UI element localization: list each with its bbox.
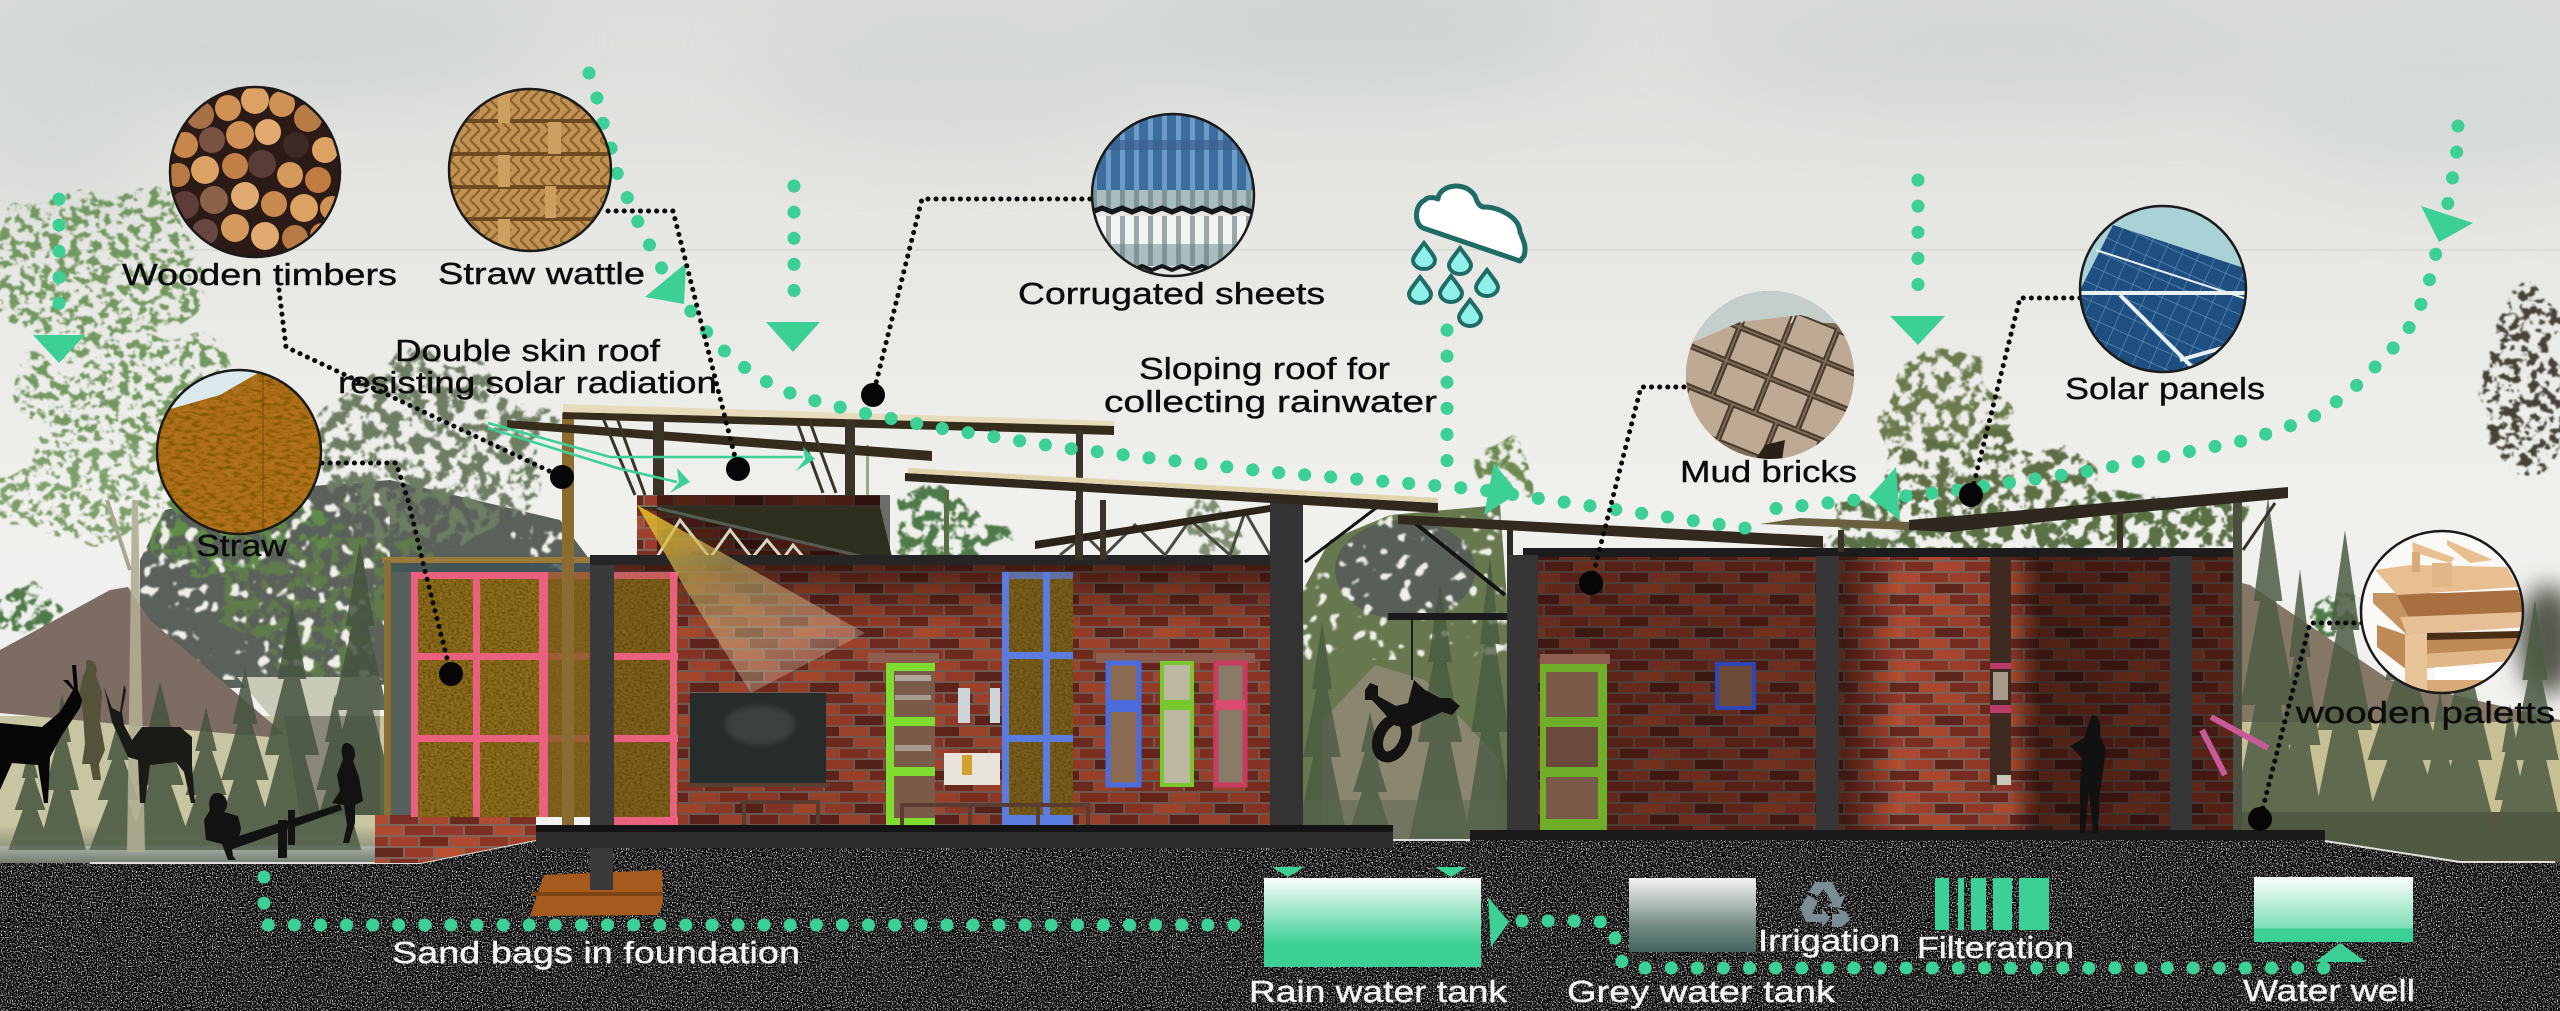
material: solar panels: [2080, 206, 2250, 375]
water flow: underground to well: [1488, 897, 2366, 968]
silhouette: woman: [2070, 715, 2106, 833]
double skin airflow arrows: [488, 423, 815, 493]
leader: wooden timbers: [279, 290, 574, 489]
label: Filteration: Filteration: [1917, 930, 2074, 965]
background: left tree: [0, 195, 250, 570]
building 1: straw panels with pink frame: [382, 413, 678, 827]
foundation with sand bags: [530, 848, 663, 916]
icon: recycle: [1800, 882, 1850, 928]
label: Wooden timbers: Wooden timbers: [122, 257, 397, 292]
icon: rain cloud: [1409, 186, 1525, 326]
roof: posts: [603, 417, 1083, 560]
label: Sand bags in foundation: Sand bags in foundation: [392, 935, 800, 970]
label: Corrugated sheets: Corrugated sheets: [1018, 276, 1325, 311]
material: wooden timbers: [166, 86, 344, 259]
roof: lower skin: [507, 420, 932, 461]
building 2: blue window: [1717, 664, 1754, 708]
background: right hut and firs: [2230, 497, 2560, 862]
label: resisting solar radiation: resisting solar radiation: [338, 365, 717, 400]
inlet arrows: [1272, 867, 1467, 877]
label: Irrigation: Irrigation: [1758, 923, 1900, 958]
label: Straw wattle: Straw wattle: [438, 256, 645, 291]
leader: corrugated sheets: [861, 199, 1090, 407]
material: corrugated sheets: [1092, 114, 1254, 276]
roof: building 2 right sheet: [1760, 487, 2288, 532]
building 1: brick wall: [375, 560, 1274, 863]
water flow: right vertical: [1890, 180, 1945, 345]
material: straw wattle: [449, 87, 612, 253]
blackboard: [688, 693, 830, 787]
pink struts: [2202, 717, 2268, 775]
building 2: brick wall: [1470, 500, 2325, 840]
silhouette: deer right: [104, 685, 195, 803]
background: trees between buildings: [1296, 505, 1516, 842]
building 1: clerestory block and trusses: [590, 495, 1274, 565]
label: Sloping roof for: Sloping roof for: [1139, 351, 1390, 386]
leader: solar panels: [1959, 298, 2080, 507]
green door: [868, 653, 939, 826]
leader lines: [279, 199, 2362, 831]
wall display and desks: [740, 688, 1090, 825]
material: wooden palletts: [2361, 531, 2523, 693]
swing with child: [1305, 505, 1507, 762]
water tanks and treatment: [1264, 867, 2413, 967]
leader: mud bricks: [1579, 387, 1684, 595]
label: Mud bricks: Mud bricks: [1680, 454, 1857, 489]
building 2: narrow pipe slot: [1990, 557, 2011, 785]
leader: wooden palletts: [2248, 623, 2362, 831]
background: left palm: [0, 587, 60, 643]
material: straw: [155, 368, 322, 535]
roof: central sloping sheet: [905, 468, 1438, 513]
roof: right supports: [1838, 503, 2275, 552]
three coloured windows: [1096, 653, 1255, 785]
label: Rain water tank: Rain water tank: [1249, 974, 1508, 1009]
label: collecting rainwater: collecting rainwater: [1104, 384, 1437, 419]
label: wooden paletts: wooden paletts: [2295, 695, 2555, 730]
ground with gravel texture: [0, 835, 2560, 1011]
roof: building 2 left sheet: [1398, 515, 1823, 548]
leader: straw: [322, 463, 463, 686]
background: left hut: [0, 587, 384, 846]
rain water tank: [1264, 878, 1481, 967]
light beam: [637, 505, 865, 693]
building 2: green door: [1540, 654, 1610, 830]
background: tree behind right building: [1880, 350, 2230, 565]
background: right building rear tree: [1840, 500, 2240, 555]
background: big trunk: [127, 500, 145, 852]
background: tree behind straw wall: [140, 350, 590, 690]
label: Grey water tank: Grey water tank: [1567, 974, 1836, 1009]
filtration bars: [1935, 878, 2049, 930]
label: Solar panels: Solar panels: [2065, 371, 2265, 406]
blue straw column: [1002, 572, 1073, 826]
label: Straw: Straw: [196, 528, 288, 563]
background: left fir trees: [0, 542, 398, 863]
silhouette: girl: [79, 660, 105, 780]
silhouette: children on seesaw: [204, 743, 363, 860]
background: palms and centre trees: [866, 431, 1526, 566]
label: Double skin roof: Double skin roof: [395, 333, 660, 368]
water flow: right curve: [1762, 126, 2473, 520]
building 1: right column and floor slab: [536, 503, 1393, 848]
label: Water well: Water well: [2243, 973, 2415, 1008]
roof: upper skin: [563, 404, 1114, 435]
roofs: [507, 404, 2288, 560]
leader: straw wattle: [608, 211, 750, 481]
water flow: underground to rain tank: [264, 877, 1245, 925]
material: mud bricks: [1686, 291, 1854, 459]
water flow: left vertical: [33, 199, 85, 363]
water flow: left roof curve: [589, 73, 1759, 530]
silhouette: deer left: [0, 665, 82, 803]
water flow: middle vertical: [766, 186, 820, 352]
background: right tree: [2316, 290, 2560, 695]
grey water tank: [1629, 878, 1756, 952]
water well: [2254, 877, 2413, 942]
water flow: rain vertical: [1440, 330, 1454, 486]
